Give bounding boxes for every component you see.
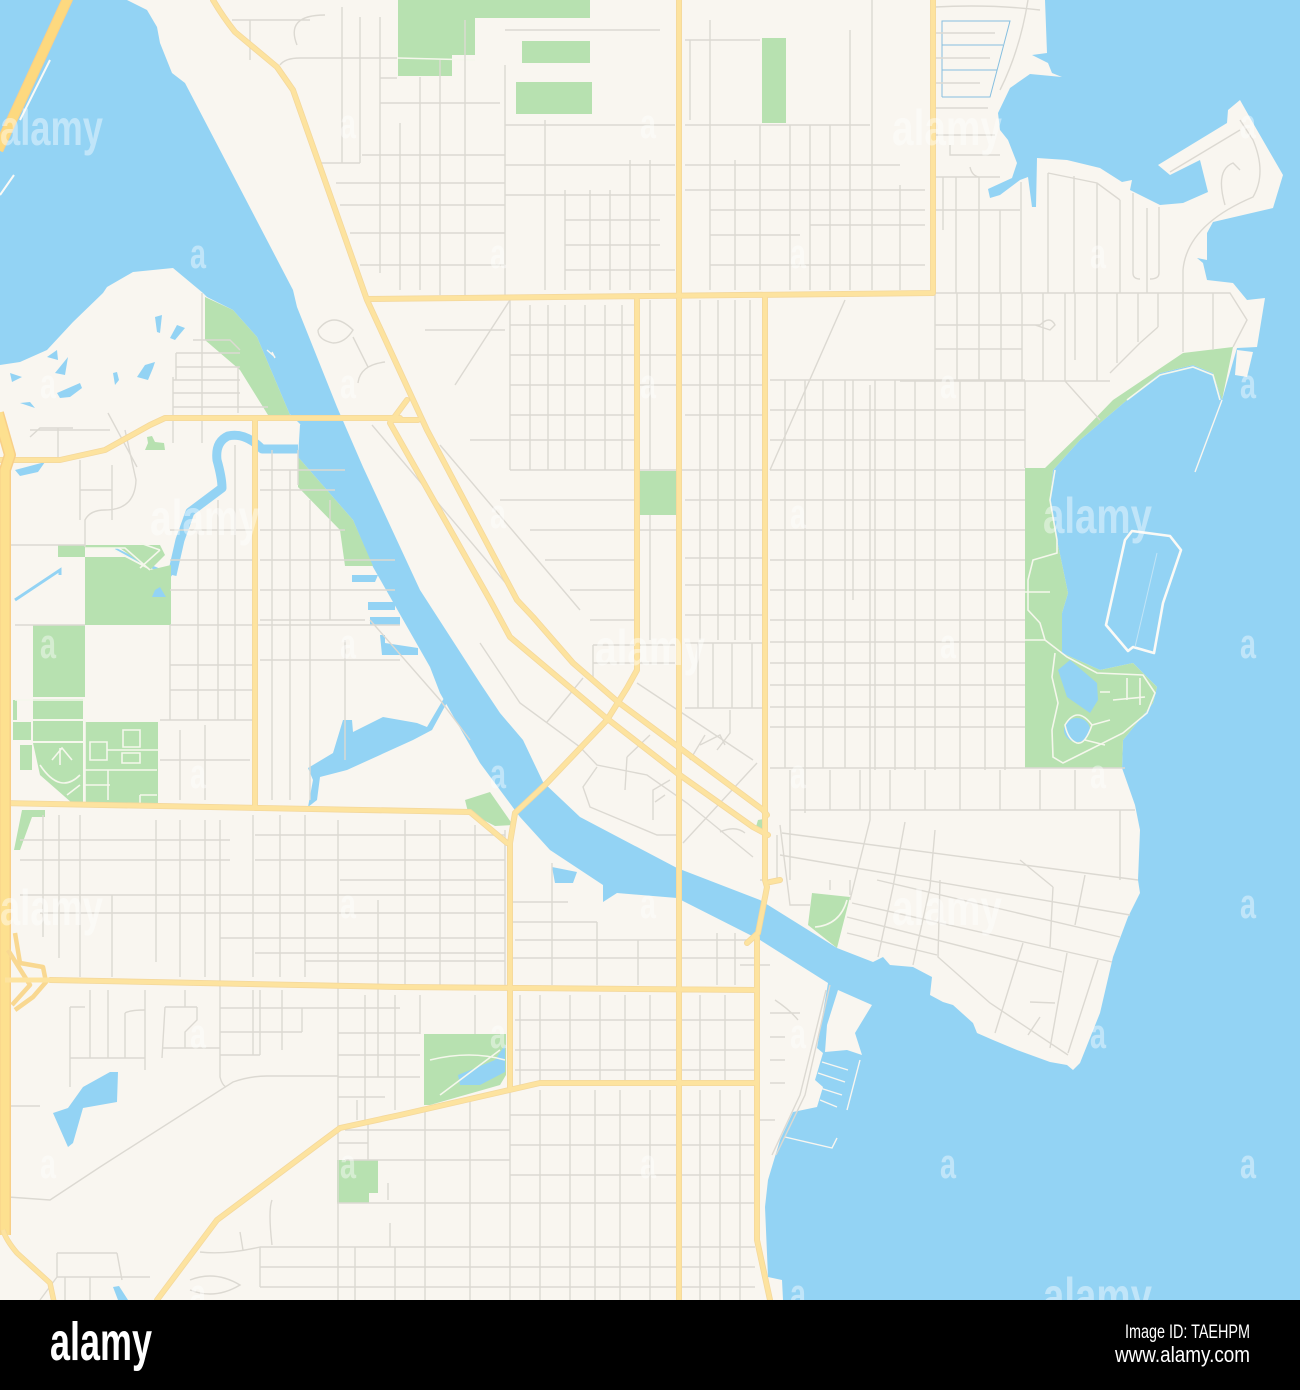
watermark marks: a: [1090, 1010, 1106, 1057]
alamy logo: alamy: [50, 1312, 152, 1372]
watermarks: alamy: [595, 620, 705, 676]
watermark marks: a: [340, 360, 356, 407]
watermark marks: a: [790, 750, 806, 797]
watermark marks: a: [490, 490, 506, 537]
watermarks: [0, 100, 1152, 1324]
freeway bridges: [0, 60, 50, 195]
freeway west: [0, 0, 68, 1302]
watermark marks: a: [340, 1140, 356, 1187]
central grids: [510, 300, 750, 640]
watermarks: alamy: [892, 100, 1002, 156]
east shore park: [1025, 347, 1233, 768]
pond under freeway: [15, 462, 45, 476]
south-west grids: [43, 815, 735, 1300]
lagoon breakwater: [1106, 531, 1181, 653]
watermark marks: a: [790, 1270, 806, 1317]
watermark marks: a: [640, 880, 656, 927]
image id: Image ID: TAEHPM: [1125, 1322, 1250, 1343]
west grids: [30, 293, 268, 467]
inner water: [15, 462, 577, 1300]
watermark marks: a: [1090, 230, 1106, 277]
watermark marks: a: [640, 100, 656, 147]
watermarks: alamy: [150, 490, 260, 546]
watermark marks: a: [1240, 360, 1256, 407]
watermark marks: a: [1240, 100, 1256, 147]
major roads: [0, 0, 933, 1300]
downtown and south-east skewed grid: [480, 643, 757, 857]
south harbour roads: [758, 965, 830, 1155]
watermark marks: a: [340, 620, 356, 667]
watermark marks: a: [1240, 880, 1256, 927]
watermark marks: a: [1240, 1140, 1256, 1187]
south grids: [70, 990, 725, 1120]
east grids: [785, 380, 1025, 813]
river basin: [552, 867, 577, 883]
peninsula ponds: [155, 315, 162, 333]
canal: [172, 435, 298, 575]
watermarks: alamy: [0, 880, 103, 936]
ponds in parks: [10, 315, 1098, 1085]
watermark marks: a: [940, 360, 956, 407]
watermarks: alamy: [1043, 488, 1152, 544]
watermark marks: a: [940, 620, 956, 667]
watermark marks: a: [40, 620, 56, 667]
watermark marks: a: [790, 230, 806, 277]
watermark marks: a: [190, 230, 206, 277]
harbour island: [825, 990, 872, 1055]
watermarks: alamy: [0, 100, 103, 156]
breakwater spine: [1135, 553, 1157, 647]
harbour piers: [267, 350, 1222, 1148]
watermark marks: a: [1240, 620, 1256, 667]
watermarks: alamy: [1043, 1268, 1152, 1324]
canal thin: [15, 549, 172, 600]
watermark marks: a: [640, 1140, 656, 1187]
footer bar: [0, 1300, 1300, 1390]
watermark marks: a: [340, 100, 356, 147]
watermark marks: a: [490, 230, 506, 277]
pier island: [1235, 350, 1253, 377]
watermark marks: a: [790, 1010, 806, 1057]
watermark marks: a: [940, 1140, 956, 1187]
watermark marks: a: [340, 880, 356, 927]
watermark marks: a: [790, 490, 806, 537]
park paths: [15, 58, 1220, 1095]
inlet west: [308, 693, 450, 807]
watermark marks: a: [490, 1010, 506, 1057]
watermark marks: a: [1090, 750, 1106, 797]
marina slips north: [942, 21, 1010, 97]
north-east grid: [943, 120, 1260, 293]
watermark marks: a: [190, 1270, 206, 1317]
marinas: [352, 575, 418, 655]
watermark marks: a: [190, 750, 206, 797]
north grid: [342, 0, 900, 295]
website: www.alamy.com: [1114, 1342, 1250, 1367]
watermark marks: a: [40, 1140, 56, 1187]
watermark marks: a: [190, 1010, 206, 1057]
watermark marks: a: [40, 360, 56, 407]
watermark marks: a: [640, 360, 656, 407]
major roads casing: [0, 0, 933, 1300]
lake south-west: [53, 1072, 118, 1147]
watermark marks: a: [490, 750, 506, 797]
watermarks: alamy: [892, 880, 1002, 936]
